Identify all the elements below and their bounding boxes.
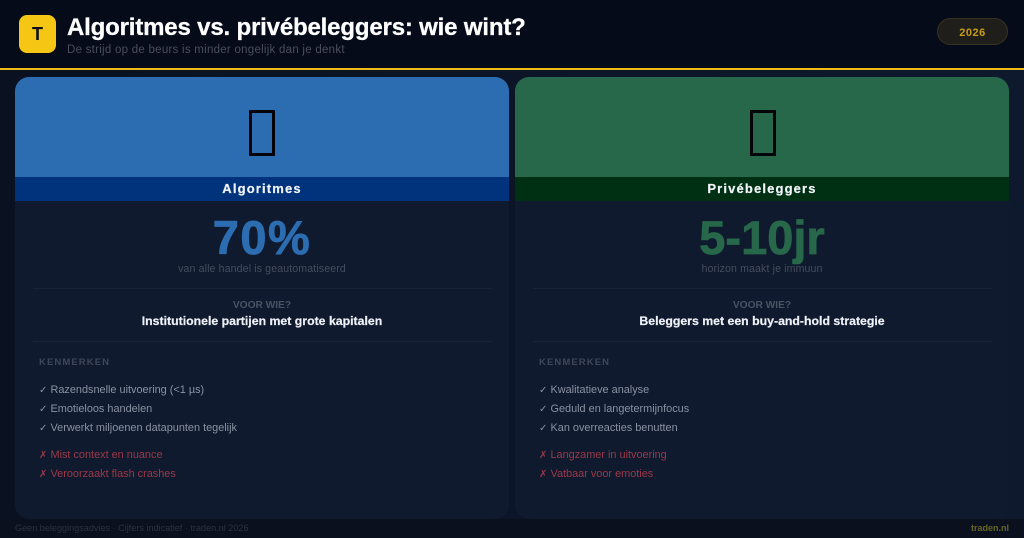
- audience label: VOOR WIE?: [733, 300, 791, 311]
- year badge: [937, 18, 1008, 45]
- brand: traden.nl: [971, 523, 1009, 533]
- pro: speed: Razendsnelle uitvoering (<1 µs): [50, 384, 204, 396]
- header: [0, 0, 1024, 70]
- pro: overreactions: Kan overreacties benutten: [550, 422, 678, 434]
- con: slower: ✗: [539, 450, 547, 461]
- con: emotions: Vatbaar voor emoties: [550, 468, 653, 480]
- hero banner: [515, 77, 1009, 177]
- icon: missing glyph box: [249, 110, 275, 156]
- features heading: KENMERKEN: [39, 357, 110, 368]
- pro: patience: ✓: [539, 404, 547, 415]
- con: emotions: ✗: [539, 469, 547, 480]
- subtitle: De strijd op de beurs is minder ongelijk dan je denkt: [67, 44, 345, 56]
- panel heading: [515, 177, 1009, 201]
- pro: analysis: ✓: [539, 385, 547, 396]
- pro: data: Verwerkt miljoenen datapunten tegelijk: [50, 422, 237, 434]
- key statistic: 70%: [213, 211, 311, 264]
- pro: speed: ✓: [39, 385, 47, 396]
- logo badge: T: [32, 24, 43, 44]
- con: context: Mist context en nuance: [50, 449, 162, 461]
- panel heading: [15, 177, 509, 201]
- pro: analysis: Kwalitatieve analyse: [550, 384, 649, 396]
- panel heading: Privébeleggers: [707, 181, 817, 196]
- con: slower: Langzamer in uitvoering: [550, 449, 667, 461]
- pro: data: ✓: [39, 423, 47, 434]
- con: context: ✗: [39, 450, 47, 461]
- footer: [0, 519, 1024, 538]
- audience label: VOOR WIE?: [233, 300, 291, 311]
- pro: overreactions: ✓: [539, 423, 547, 434]
- statistic caption: van alle handel is geautomatiseerd: [178, 263, 346, 275]
- pro: no emotion: Emotieloos handelen: [50, 403, 152, 415]
- panel: Algoritmes: [15, 77, 509, 519]
- pro: no emotion: ✓: [39, 404, 47, 415]
- con: flash crashes: Veroorzaakt flash crashes: [50, 468, 176, 480]
- pro: patience: Geduld en langetermijnfocus: [550, 403, 689, 415]
- logo badge: [19, 15, 56, 53]
- audience text: Beleggers met een buy-and-hold strategie: [639, 314, 885, 328]
- key statistic: 5-10jr: [699, 211, 825, 264]
- disclaimer: Geen beleggingsadvies · Cijfers indicatief · traden.nl 2026: [15, 523, 249, 533]
- title: Algoritmes vs. privébeleggers: wie wint?: [67, 14, 526, 41]
- con: flash crashes: ✗: [39, 469, 47, 480]
- features heading: KENMERKEN: [539, 357, 610, 368]
- year badge: 2026: [959, 27, 986, 39]
- hero banner: [15, 77, 509, 177]
- icon: missing glyph box: [750, 110, 776, 156]
- audience text: Institutionele partijen met grote kapitalen: [142, 314, 382, 328]
- statistic caption: horizon maakt je immuun: [701, 263, 823, 275]
- panel: Privébeleggers: [515, 77, 1009, 519]
- panel heading: Algoritmes: [222, 181, 302, 196]
